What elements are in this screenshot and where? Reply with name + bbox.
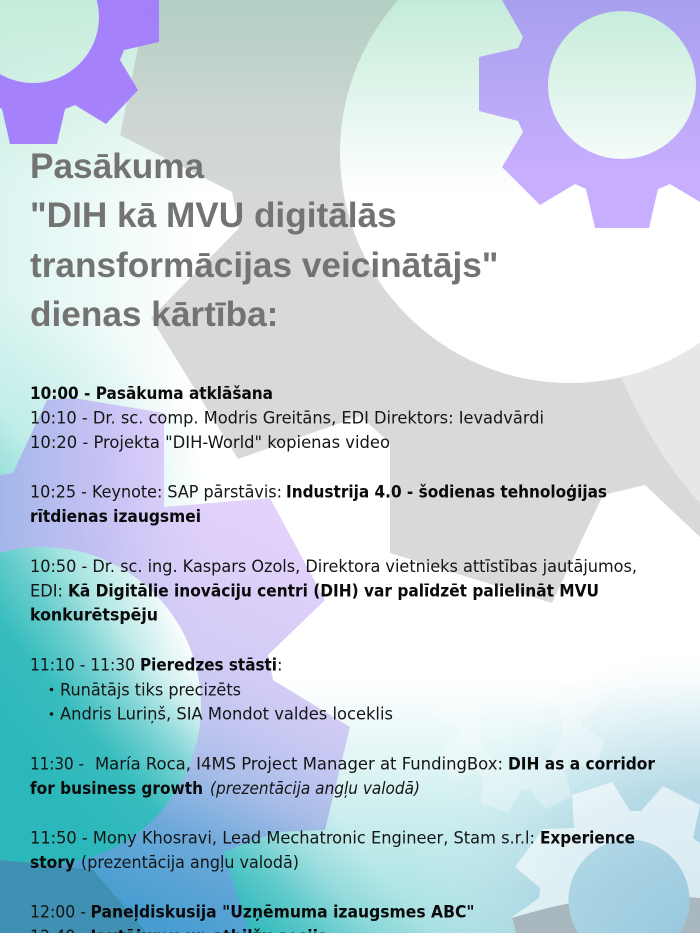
agenda item 11:10: Andris Luriņš, SIA Mondot valdes loceklis <box>60 705 393 724</box>
agenda item 11:30: 11:30 - <box>30 754 84 773</box>
agenda item 11:10: Pieredzes stāsti <box>140 656 277 675</box>
agenda item 10:50: Kā Digitālie inovāciju centri (DIH) var palīdzēt palielināt MVU <box>68 582 599 601</box>
agenda item 11:10: Runātājs tiks precizēts <box>60 680 241 699</box>
agenda item 11:10: 11:10 - 11:30 <box>30 656 135 675</box>
title: transformācijas veicinātājs" <box>30 246 498 285</box>
agenda item 10:10: 10:10 - Dr. sc. comp. Modris Greitāns, EDI Direktors: Ievadvārdi <box>30 409 544 428</box>
agenda item 11:50: 11:50 - Mony Khosravi, Lead Mechatronic Engineer, Stam s.r.l: <box>30 828 535 847</box>
agenda item 11:50: (prezentācija angļu valodā) <box>81 853 299 872</box>
agenda item 10:25 <box>30 483 607 526</box>
agenda item 11:50 <box>30 828 635 872</box>
agenda item 11:30 <box>30 754 656 798</box>
purple gear top right <box>479 0 700 228</box>
agenda item 11:50: story <box>30 853 75 872</box>
agenda item 10:50: EDI: <box>30 582 63 601</box>
purple gear top left <box>0 0 159 144</box>
title: dienas kārtība: <box>30 295 278 334</box>
agenda item 10:00: 10:00 - Pasākuma atklāšana <box>30 384 273 403</box>
title: Pasākuma <box>30 147 205 186</box>
agenda item 11:30: (prezentācija angļu valodā) <box>210 779 420 798</box>
agenda item 10:25: Industrija 4.0 - šodienas tehnoloģijas <box>286 483 607 502</box>
agenda item 10:50: konkurētspēju <box>30 606 158 625</box>
white gear bottom right <box>512 782 700 933</box>
agenda item 10:50 <box>30 557 637 625</box>
title <box>30 147 498 334</box>
agenda item 12:00: 12:00 - <box>30 902 86 921</box>
lavender gear lower left <box>0 398 350 933</box>
large grey gear <box>120 0 700 603</box>
agenda item 11:10 <box>30 656 393 724</box>
agenda item 10:50: 10:50 - Dr. sc. ing. Kaspars Ozols, Direktora vietnieks attīstības jautājumos, <box>30 557 637 576</box>
agenda item 11:50: Experience <box>540 828 635 847</box>
agenda item 11:30: DIH as a corridor <box>508 754 656 773</box>
agenda item 11:10: : <box>277 656 283 675</box>
agenda item 10:20: 10:20 - Projekta "DIH-World" kopienas video <box>30 433 390 452</box>
agenda text <box>30 384 656 933</box>
faint white gear <box>442 728 604 812</box>
agenda item 10:25: rītdienas izaugsmei <box>30 507 201 526</box>
agenda item 10:25: 10:25 - Keynote: SAP pārstāvis: <box>30 483 282 502</box>
agenda item 11:30: for business growth <box>30 779 203 798</box>
title: "DIH kā MVU digitālās <box>30 196 397 235</box>
agenda item 12:00: Paneļdiskusija "Uzņēmuma izaugsmes ABC" <box>90 902 474 921</box>
agenda item 11:30: María Roca, I4MS Project Manager at FundingBox: <box>95 754 503 773</box>
